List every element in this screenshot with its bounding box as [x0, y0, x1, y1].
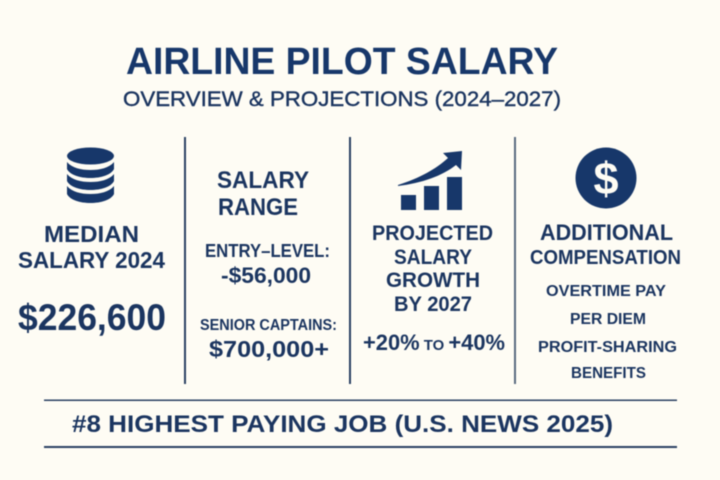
heading: salary range: RANGE	[218, 194, 298, 221]
heading: additional compensation: COMPENSATION	[530, 247, 681, 269]
panel: median salary	[18, 148, 166, 338]
panel: additional compensation	[530, 148, 681, 382]
heading: median salary 2024: MEDIAN	[44, 221, 139, 247]
entry-level salary: -$56,000	[221, 263, 311, 288]
icon: rising bar chart with arrow	[398, 151, 462, 210]
subtitle: OVERVIEW & PROJECTIONS (2024–2027)	[123, 88, 561, 111]
heading: projected salary growth by 2027: SALARY	[394, 245, 472, 269]
compensation list: OVERTIME PAY	[546, 283, 666, 300]
heading: projected salary growth by 2027: GROWTH	[386, 268, 480, 292]
heading: projected salary growth by 2027	[372, 221, 493, 316]
panel: projected growth	[363, 151, 505, 355]
footer banner: #8 HIGHEST PAYING JOB (U.S. NEWS 2025)	[72, 411, 613, 438]
compensation list	[538, 283, 677, 382]
title: AIRLINE PILOT SALARY	[126, 41, 558, 83]
compensation list: PER DIEM	[570, 311, 646, 328]
senior captains salary	[200, 317, 337, 362]
value: growth range: +20% TO +40%	[363, 330, 505, 355]
panel: salary range	[200, 167, 337, 362]
entry-level salary: ENTRY–LEVEL:	[205, 241, 330, 261]
heading: median salary 2024: SALARY 2024	[18, 247, 165, 273]
heading: salary range	[217, 167, 309, 221]
icon: coin stack	[67, 148, 114, 203]
entry-level salary	[205, 241, 330, 288]
heading: additional compensation	[530, 220, 681, 269]
value: median salary: $226,600	[18, 297, 166, 338]
compensation list: BENEFITS	[571, 365, 646, 382]
icon: dollar coin: $	[593, 153, 619, 204]
senior captains salary: $700,000+	[209, 336, 329, 362]
heading: median salary 2024	[18, 221, 165, 273]
icon: dollar coin	[576, 148, 636, 208]
heading: projected salary growth by 2027: BY 2027	[394, 292, 472, 316]
heading: projected salary growth by 2027: PROJECTED	[372, 221, 493, 245]
compensation list: PROFIT-SHARING	[538, 339, 677, 356]
senior captains salary: SENIOR CAPTAINS:	[200, 317, 337, 334]
heading: additional compensation: ADDITIONAL	[540, 220, 673, 245]
heading: salary range: SALARY	[217, 167, 309, 194]
